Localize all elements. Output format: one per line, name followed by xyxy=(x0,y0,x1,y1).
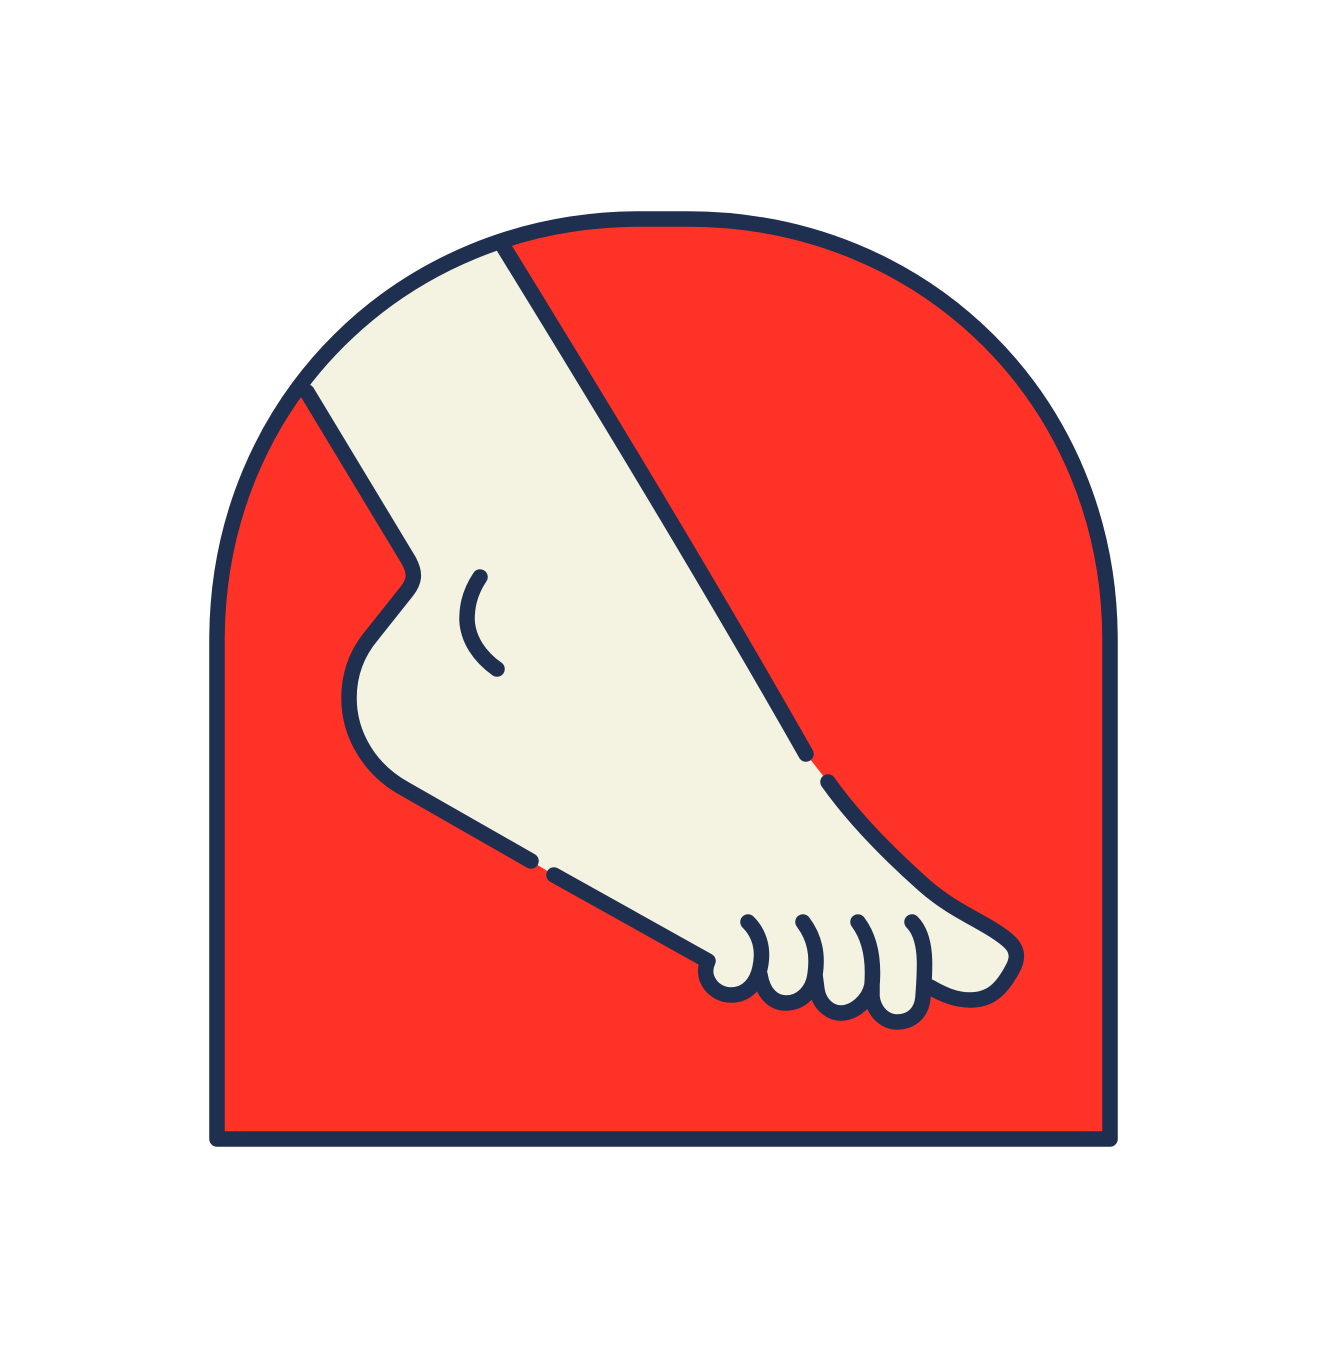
foot fill xyxy=(300,225,1016,1022)
foot outline: top of foot to big toe xyxy=(828,782,1016,1000)
arch background panel xyxy=(217,219,1110,1139)
foot outline: sole to toes xyxy=(554,875,925,1022)
arch outline xyxy=(217,219,1110,1139)
icon: foot in red arch badge xyxy=(209,211,1118,1147)
ankle bone crease xyxy=(467,577,497,669)
foot outline: upper shin to ankle xyxy=(503,246,806,754)
foot outline: back of leg and heel xyxy=(307,392,531,861)
